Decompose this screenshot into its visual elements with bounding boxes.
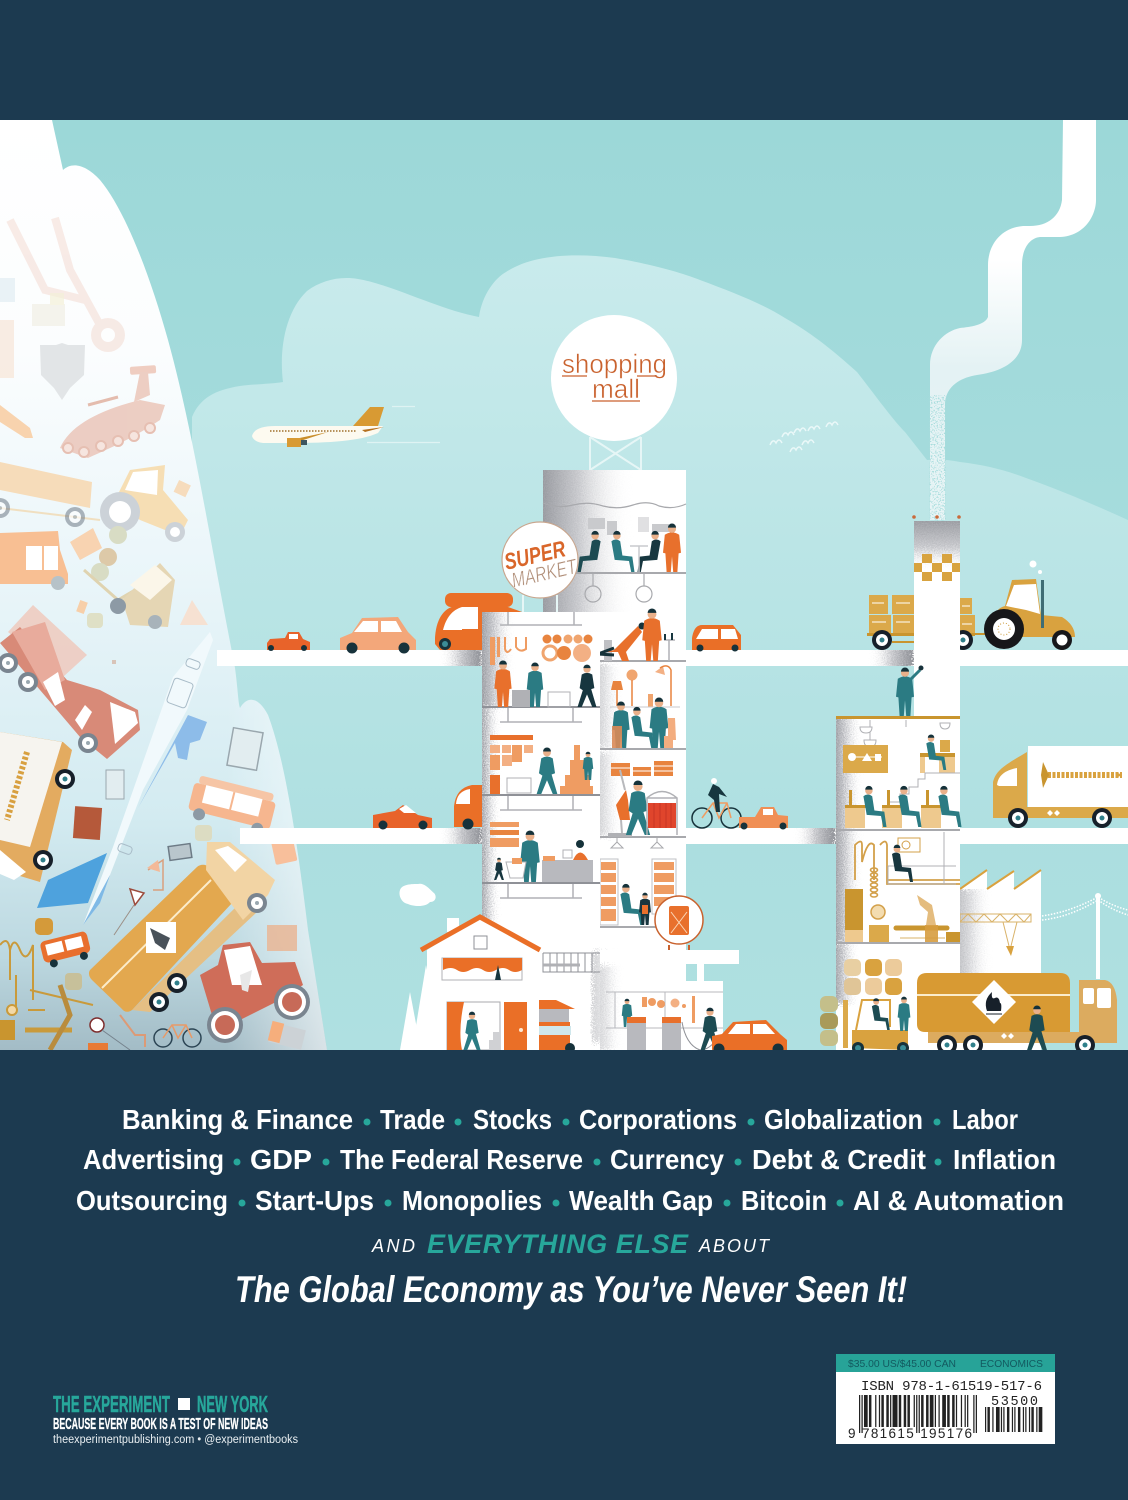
road sign and lamp: [114, 860, 163, 935]
sky: [0, 120, 1128, 1050]
topic list line 3: Bitcoin: [741, 1185, 827, 1216]
topic list line 1: Stocks: [473, 1104, 552, 1135]
book floor: [600, 859, 676, 927]
hanging ring lamps: [585, 574, 652, 602]
supermarket round sign: [502, 522, 581, 612]
airplane: [252, 406, 440, 447]
birds: [770, 422, 838, 452]
pickup truck: [267, 632, 310, 651]
tractor: [984, 560, 1075, 650]
fuel can sign: [655, 896, 703, 950]
pipes and robot arm: [0, 941, 93, 1050]
and everything else about: ABOUT: [698, 1236, 771, 1256]
production floor: [836, 832, 960, 943]
topic list line 1: Corporations: [579, 1104, 737, 1135]
hanging hangers: [611, 838, 663, 848]
white trees: [400, 965, 443, 1050]
faded tractor: [100, 465, 191, 542]
shelf bracket: [500, 884, 582, 898]
salon floor: [598, 608, 686, 661]
forklift: [843, 997, 910, 1054]
red tractor: [200, 942, 310, 1043]
topic list line 3: AI & Automation: [853, 1185, 1064, 1216]
topic list line 1: Banking & Finance: [122, 1104, 353, 1135]
topic list line 2: Advertising: [83, 1144, 224, 1175]
boxes aisle: [482, 735, 600, 795]
bicycle: [154, 1025, 201, 1047]
barcode box: [836, 1354, 1055, 1444]
and everything else about: EVERYTHING ELSE: [427, 1229, 689, 1259]
supermarket building: [476, 606, 618, 1053]
RV on upper road: [435, 593, 522, 650]
storage crates: [844, 959, 902, 995]
factory saw-tooth hall: [952, 870, 1041, 1050]
barcode box: 9 781615 195176: [848, 1426, 972, 1441]
lower road: [240, 828, 1128, 844]
publisher block: BECAUSE EVERY BOOK IS A TEST OF NEW IDEAS: [53, 1416, 268, 1433]
barcode box: 53500: [991, 1395, 1038, 1410]
barcode box: ISBN 978-1-61519-517-6: [861, 1379, 1042, 1395]
faded claw: [10, 218, 125, 352]
car behind building: [454, 785, 482, 830]
shop house: [421, 917, 540, 1050]
publisher block: theexperimentpublishing.com • @experimentbooks: [53, 1434, 298, 1446]
chimney puff: [399, 884, 436, 906]
shopping mall sign: mall: [592, 374, 640, 404]
smoke plume: [929, 120, 1096, 521]
faded tank: [60, 365, 165, 458]
peach bus: [188, 776, 276, 828]
peach mini car: [340, 617, 416, 654]
shelf bracket: [500, 708, 582, 722]
bottom navy panel: [0, 1050, 1128, 1500]
faded crates: [0, 278, 65, 378]
shelf bracket: [500, 796, 582, 810]
topic list line 3: [76, 1185, 1064, 1216]
tractor with hay trailer: [867, 560, 1075, 650]
topic list line 2: Currency: [610, 1144, 724, 1175]
publisher block: THE EXPERIMENT: [53, 1391, 170, 1417]
cafe floor: [575, 517, 686, 573]
airliner with blue wing: [37, 632, 213, 925]
barcode box: ECONOMICS: [980, 1358, 1043, 1370]
rack of coats: [73, 806, 102, 840]
supermarket round sign: MARKET: [509, 555, 581, 593]
publisher block: NEW YORK: [197, 1391, 268, 1417]
gas station: [596, 950, 787, 1054]
furniture floor: [600, 666, 686, 749]
worker on roof: [896, 666, 924, 716]
fuel tanker tumbling: [89, 842, 275, 1012]
topic list line 1: Globalization: [764, 1104, 923, 1135]
drums: [820, 996, 838, 1046]
faded forklift and crate: [70, 526, 208, 629]
pile of goods mountain: [0, 120, 330, 1050]
topic list line 1: [122, 1104, 1018, 1135]
barcode box: $35.00 US/$45.00 CAN: [848, 1358, 956, 1370]
and everything else about: AND: [371, 1236, 415, 1256]
bright edge glow: [242, 720, 327, 1050]
upper road: [217, 650, 1128, 666]
produce aisle: [482, 612, 600, 707]
topic list line 2: Debt & Credit: [752, 1144, 926, 1175]
red crane truck: [0, 605, 140, 759]
mall tower: [542, 470, 686, 950]
illustration panel: [0, 120, 1128, 1055]
topic list line 1: Trade: [380, 1104, 445, 1135]
chimney: [908, 511, 966, 721]
shopping mall sign: shopping: [562, 349, 667, 379]
faded eagle: [40, 343, 85, 400]
cloud: [192, 255, 1128, 760]
office floor: [836, 720, 962, 830]
pickup lower road: [739, 807, 788, 830]
fuel tanker truck: [917, 973, 1117, 1055]
fashion floor: [600, 761, 686, 837]
topic list line 1: Labor: [952, 1104, 1018, 1135]
topic list line 3: Outsourcing: [76, 1185, 228, 1216]
publisher block: [53, 1391, 298, 1446]
vehicles upper road left: [267, 617, 416, 654]
tagline: The Global Economy as You’ve Never Seen It!: [235, 1269, 907, 1310]
minibus upper road: [692, 625, 741, 652]
top navy band: [0, 0, 1128, 120]
cyclist: [692, 778, 741, 828]
topic list line 3: Monopolies: [402, 1185, 542, 1216]
screw delivery truck: [0, 732, 75, 882]
hay trailer: [867, 595, 986, 650]
faded RV: [0, 531, 68, 590]
topic list line 2: [83, 1144, 1056, 1175]
and everything else about: [371, 1229, 771, 1259]
convertible: [373, 805, 432, 830]
small orange bus: [40, 932, 90, 968]
topic list line 3: Wealth Gap: [569, 1185, 713, 1216]
trolley rack: [543, 953, 600, 972]
topic list line 3: Start-Ups: [255, 1185, 374, 1216]
screw delivery truck on lower road: [993, 746, 1128, 828]
scattered pictures: [106, 728, 263, 860]
factory office tower: [830, 666, 962, 1050]
grey box and chair: [88, 925, 306, 1050]
supermarket round sign: SUPER: [502, 535, 568, 575]
topic list line 2: GDP: [250, 1144, 312, 1175]
floating rounded crates: [35, 613, 212, 990]
peach jerrycan: [272, 844, 298, 865]
topic list line 2: The Federal Reserve: [340, 1144, 583, 1175]
checkout aisle: [482, 822, 600, 883]
topic list line 2: Inflation: [953, 1144, 1056, 1175]
shopping mall sign: [551, 315, 677, 470]
faded orange log truck: [0, 405, 100, 527]
utility pole and wires: [1042, 893, 1128, 979]
parked RV: [539, 1000, 575, 1053]
